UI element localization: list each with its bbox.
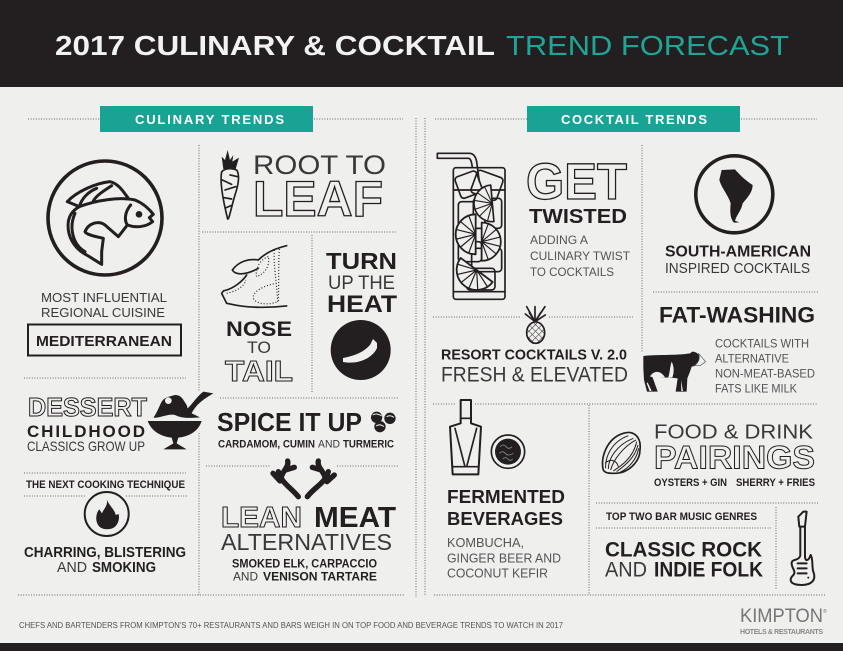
title — [55, 30, 789, 61]
text: charring: SMOKING — [92, 560, 156, 576]
heading: get: GET — [526, 153, 627, 210]
icon: fish in circle — [48, 161, 162, 275]
heading: dessert: DESSERT — [28, 392, 147, 422]
icon: spices — [371, 412, 396, 432]
text: and indie folk: AND — [605, 558, 647, 582]
panel: get twisted — [437, 153, 631, 299]
heading: tail: TAIL — [225, 356, 293, 388]
logo: kimpton: ® — [823, 608, 827, 615]
heading: spice it up: SPICE IT UP — [217, 407, 362, 437]
text: and indie folk — [605, 558, 763, 582]
panel: root to leaf — [221, 150, 386, 227]
text: resort cocktails: RESORT COCKTAILS V. 2.0 — [441, 346, 627, 364]
text: spice list: AND — [318, 438, 340, 450]
text: fat-washing description: FATS LIKE MILK — [715, 384, 797, 396]
banner: culinary trends: CULINARY TRENDS — [135, 112, 284, 127]
text: kombucha list: COCONUT KEFIR — [447, 566, 548, 580]
icon: oyster — [602, 432, 640, 473]
text: south-american: INSPIRED COCKTAILS — [665, 261, 810, 277]
heading: leaf: LEAF — [253, 171, 383, 227]
heading: turn up the heat — [326, 248, 397, 318]
bottom band — [0, 643, 843, 651]
text: south-american: SOUTH-AMERICAN — [665, 244, 811, 260]
icon: bottle — [450, 400, 481, 474]
panel: cooking technique — [24, 479, 186, 576]
panel: turn up the heat — [326, 248, 397, 380]
heading: twisted: TWISTED — [529, 206, 627, 228]
heading: to: TO — [247, 338, 271, 357]
text: fat-washing description: NON-MEAT-BASED — [715, 368, 815, 380]
footer note: CHEFS AND BARTENDERS FROM KIMPTON'S 70+ RESTAURANTS AND BARS WEIGH IN ON TOP FOOD AND BEVERAGE TRENDS TO WATCH IN 2017 — [19, 621, 564, 630]
text: fresh and elevated: FRESH & ELEVATED — [441, 364, 628, 386]
text: fat-washing description: ALTERNATIVE — [715, 354, 789, 366]
text: adding a twist: ADDING A — [530, 233, 588, 247]
text: lean meat list: SMOKED ELK, CARPACCIO — [232, 558, 377, 570]
heading: turn up the heat: TURN — [326, 248, 397, 274]
logo: kimpton: KIMPTON — [740, 606, 823, 627]
text: spice list: TURMERIC — [343, 438, 394, 450]
banner: cocktail trends: COCKTAIL TRENDS — [561, 112, 707, 127]
heading: turn up the heat: HEAT — [327, 291, 397, 318]
title: TREND FORECAST — [506, 30, 789, 61]
text: fat-washing description: COCKTAILS WITH — [715, 338, 809, 350]
text: most influential: MOST INFLUENTIAL — [41, 290, 167, 305]
icon: cow — [643, 352, 706, 392]
heading: alternatives: ALTERNATIVES — [221, 529, 392, 555]
icon: pineapple — [525, 307, 545, 343]
text: kombucha list — [447, 535, 561, 580]
banner: culinary trends — [100, 106, 313, 132]
text: spice list — [218, 438, 394, 450]
logo: kimpton: HOTELS & RESTAURANTS — [740, 629, 823, 636]
text: classic rock: CLASSIC ROCK — [605, 538, 762, 562]
panel: dessert — [27, 392, 213, 454]
text: adding a twist: CULINARY TWIST — [530, 249, 631, 263]
label box: mediterranean — [28, 324, 181, 356]
banner: cocktail trends — [527, 106, 740, 132]
panel: fat-washing — [643, 302, 815, 396]
heading: lean meat: MEAT — [314, 502, 396, 534]
panel: resort cocktails — [441, 307, 628, 386]
text: fat-washing description — [715, 338, 815, 396]
panel: mediterranean — [28, 161, 181, 356]
text: kombucha list: GINGER BEER AND — [447, 550, 561, 566]
icon: guitar — [791, 512, 814, 585]
text: charring: CHARRING, BLISTERING — [24, 545, 186, 561]
icon: carrot — [221, 150, 239, 219]
panel: nose to tail — [222, 246, 293, 388]
panel: spice it up — [217, 407, 396, 450]
heading: top two bar music genres: TOP TWO BAR MUSIC GENRES — [606, 511, 757, 523]
text: and indie folk: INDIE FOLK — [654, 558, 763, 582]
text: kombucha list: KOMBUCHA, — [447, 535, 524, 550]
text: lean meat list: AND — [233, 572, 258, 584]
text: spice list: CARDAMOM, CUMIN — [218, 438, 315, 450]
text: adding a twist: TO COCKTAILS — [530, 265, 614, 279]
text: adding a twist — [530, 233, 631, 279]
text: pairing examples: SHERRY + FRIES — [736, 477, 815, 489]
heading: fermented beverages: FERMENTED — [447, 487, 565, 507]
text: pairing examples: OYSTERS + GIN — [654, 477, 727, 489]
title: 2017 CULINARY & COCKTAIL — [55, 30, 495, 61]
panel: lean meat — [221, 461, 396, 584]
heading: fermented beverages — [447, 487, 565, 529]
text: charring — [24, 545, 186, 576]
text: classics grow up: CLASSICS GROW UP — [27, 438, 145, 454]
text: most influential — [41, 290, 167, 320]
text: pairing examples — [654, 477, 815, 489]
text: lean meat list: VENISON TARTARE — [263, 572, 377, 584]
heading: nose: NOSE — [226, 317, 292, 341]
heading: turn up the heat: UP THE — [328, 273, 395, 294]
heading: pairings: PAIRINGS — [654, 440, 815, 476]
panel: fermented beverages — [447, 400, 565, 580]
panel: food and drink pairings — [602, 420, 815, 489]
text: most influential: REGIONAL CUISINE — [41, 305, 165, 320]
heading: fat-washing: FAT-WASHING — [659, 302, 815, 328]
text: lean meat list — [232, 558, 377, 584]
icon: cocktail glass — [437, 153, 505, 299]
text: south-american — [665, 244, 811, 277]
text: charring: AND — [57, 560, 87, 576]
icon: antlers — [273, 461, 334, 497]
heading: lean meat: LEAN — [221, 502, 302, 534]
heading: food and drink: FOOD & DRINK — [654, 420, 813, 444]
heading: next cooking technique: THE NEXT COOKING TECHNIQUE — [26, 479, 185, 491]
icon: chili in circle — [331, 320, 391, 380]
icon: sundae bowl — [148, 392, 213, 449]
panel: south-american — [665, 156, 811, 277]
header band — [0, 0, 843, 87]
panel: bar music — [605, 511, 814, 585]
icon: pig — [222, 246, 287, 307]
text: childhood: CHILDHOOD — [27, 422, 145, 441]
heading: lean meat — [221, 502, 396, 534]
icon: flame in circle — [85, 492, 129, 536]
heading: fermented beverages: BEVERAGES — [447, 509, 563, 529]
logo: kimpton — [740, 606, 827, 636]
heading: root to: ROOT TO — [253, 150, 386, 180]
label box: mediterranean: MEDITERRANEAN — [36, 333, 172, 350]
icon: kombucha disc — [491, 435, 525, 468]
icon: south america in circle — [696, 156, 773, 233]
